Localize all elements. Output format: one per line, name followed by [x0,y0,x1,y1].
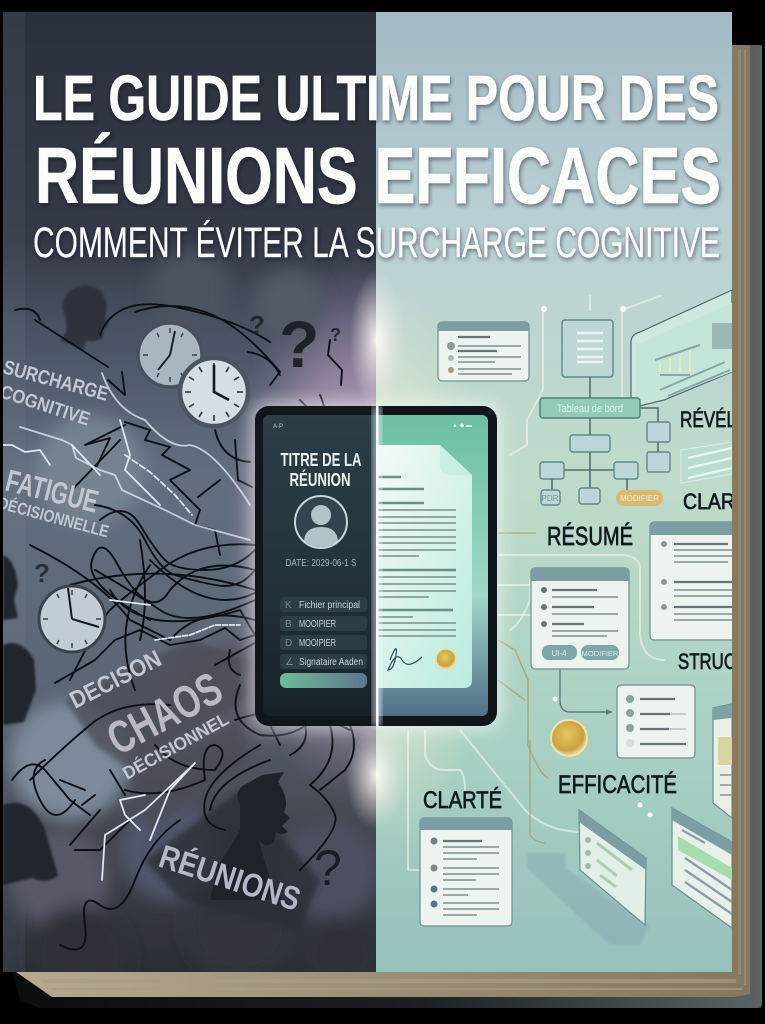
panel: dashboard perspective [631,290,732,408]
title [33,62,721,267]
meeting file rows: Signataire Aaden [299,657,363,668]
chaos words: DÉCISIONNEL [119,708,232,783]
org chart nodes [540,422,670,506]
org chart nodes: MODIFIER [620,494,659,503]
meeting title [280,453,362,486]
storm clouds [10,250,380,1005]
labels clipped by page edge: CLAR [683,489,735,514]
silhouette: head bottom right [210,772,290,900]
dark swathes behind chaos words [65,640,320,930]
question marks: ? [330,325,341,345]
cover: dark left half [3,12,376,972]
question marks: ? [34,558,50,588]
tablet light screen [263,415,488,716]
dashboard bar label [540,398,640,418]
org chart nodes: PDR [542,494,559,503]
meeting title: TITRE DE LA [280,450,362,470]
meeting file rows [280,597,367,669]
meeting date: DATE: 2029-06-1 S [286,558,357,569]
seal [436,649,456,669]
meeting title: RÉUNION [290,469,350,490]
clock B [180,358,248,426]
panel: side window [713,704,732,818]
tablet [250,401,502,731]
silhouette: left heads [3,555,58,885]
question marks: ? [314,840,342,896]
tablet dark screen [263,415,376,716]
lightning lines [0,373,250,880]
small stripes panel [681,442,732,483]
heading: efficacité: EFFICACITÉ [558,770,677,799]
labels clipped by page edge: STRUC [678,649,736,674]
card: modifier: MODIFIER [582,649,619,658]
chaos words: DÉCISIONNELLE [0,494,111,541]
meeting file rows: ∠ [285,657,294,668]
chaos words: RÉUNIONS [155,837,305,918]
chaos words: DECISON [65,645,166,714]
heading: clarté: CLARTÉ [423,787,502,814]
signature [388,649,422,670]
icon: gold coin [551,720,587,756]
clock A [138,323,202,387]
cover: light right half [376,12,732,972]
meeting file rows: K [285,600,292,611]
card: checklist [617,685,695,758]
labels clipped by page edge [678,407,736,674]
labels clipped by page edge: RÉVÉL [680,407,736,432]
chaos words: COGNITIVE [0,382,92,430]
card: top centre list [562,320,613,377]
question marks: ? [279,307,319,381]
tablet light screen: ▲ ◆ ▬ [452,423,472,429]
question marks: ? [249,310,265,340]
card: clarté [420,818,512,926]
card: modifier: UI-4 [551,649,567,658]
meeting file rows: MOOIPIER [299,619,336,630]
dashboard bar label: Tableau de bord [557,403,623,415]
card: modifier [531,568,629,669]
question marks [34,307,342,896]
avatar icon [295,496,347,548]
silhouette: head top [60,285,108,350]
black tangled lines [12,304,354,950]
chaos words: SURCHARGE [1,357,111,406]
document [370,445,472,688]
card: top left [438,322,529,381]
panel: perspective window right [672,808,732,928]
chaos words: FATIGUE [2,463,102,520]
card: right résumé [650,522,740,640]
tablet dark screen: A·P [273,424,283,430]
chaos words [0,357,305,918]
action button [280,673,367,688]
meeting file rows: B [285,619,292,630]
panel: perspective window left [527,810,650,945]
tablet body [255,406,497,726]
glowing divider [372,406,382,726]
chaos words: CHAOS [98,662,230,765]
meeting file rows: Fichier principal [299,600,360,611]
meeting file rows: D [285,638,292,649]
clock C [39,586,105,652]
meeting file rows: MOOIPIER [299,638,336,649]
right connector lines [408,296,665,870]
heading: résumé: RÉSUMÉ [547,521,633,551]
